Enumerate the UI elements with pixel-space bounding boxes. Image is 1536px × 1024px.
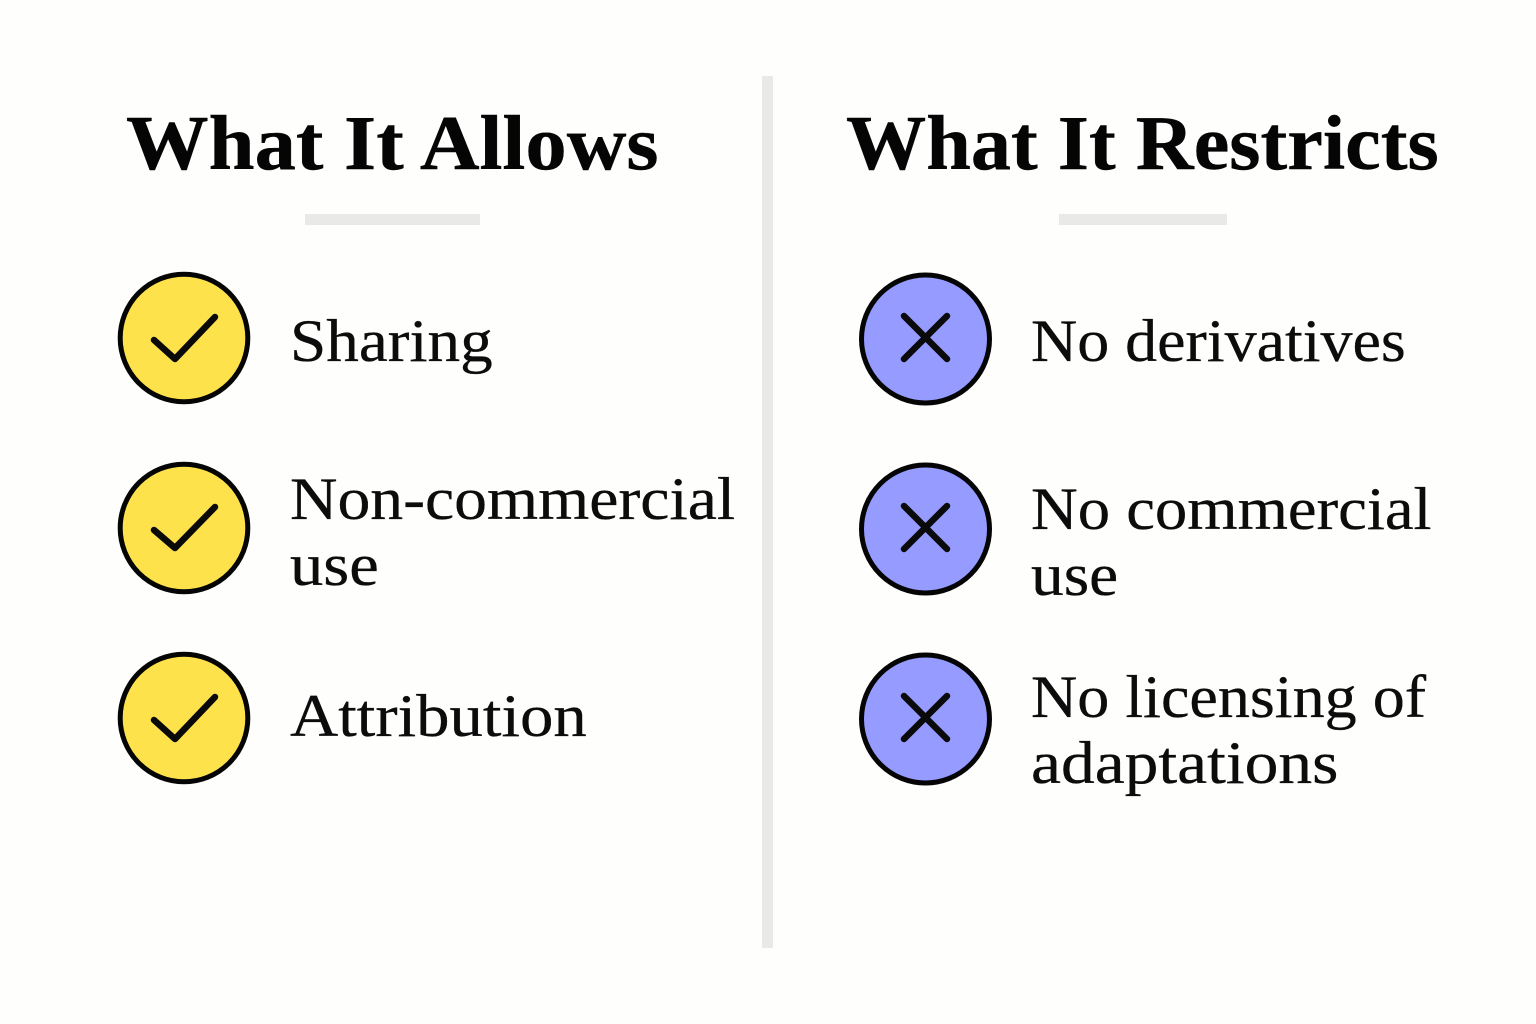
panel: what it allows (118, 100, 735, 784)
text: non-commercial use (290, 466, 735, 598)
icon: check 2 (118, 462, 250, 594)
text: sharing: Sharing (290, 308, 493, 374)
icon: check 1 (118, 272, 250, 404)
icon: cross 2 (859, 462, 992, 596)
text: no licensing of adaptations (1031, 664, 1426, 796)
heading: what it restricts: What It Restricts (846, 100, 1439, 186)
text: no licensing of adaptations: adaptations (1031, 730, 1338, 796)
text: no derivatives: No derivatives (1031, 308, 1406, 374)
icon: cross 3 (859, 652, 992, 786)
text: no licensing of adaptations: No licensing of (1031, 664, 1426, 730)
text: attribution: Attribution (290, 683, 587, 749)
text: no commercial use (1031, 476, 1431, 608)
text: non-commercial use: use (290, 532, 379, 598)
heading: what it allows: What It Allows (126, 100, 659, 186)
center divider (762, 76, 773, 948)
panel: what it restricts (846, 100, 1439, 796)
text: no commercial use: No commercial (1031, 476, 1431, 542)
text: non-commercial use: Non-commercial (290, 466, 735, 532)
heading underline (1059, 214, 1227, 225)
text: no commercial use: use (1031, 542, 1118, 608)
icon: cross 1 (859, 272, 992, 406)
heading underline (305, 214, 480, 225)
icon: check 3 (118, 652, 250, 784)
